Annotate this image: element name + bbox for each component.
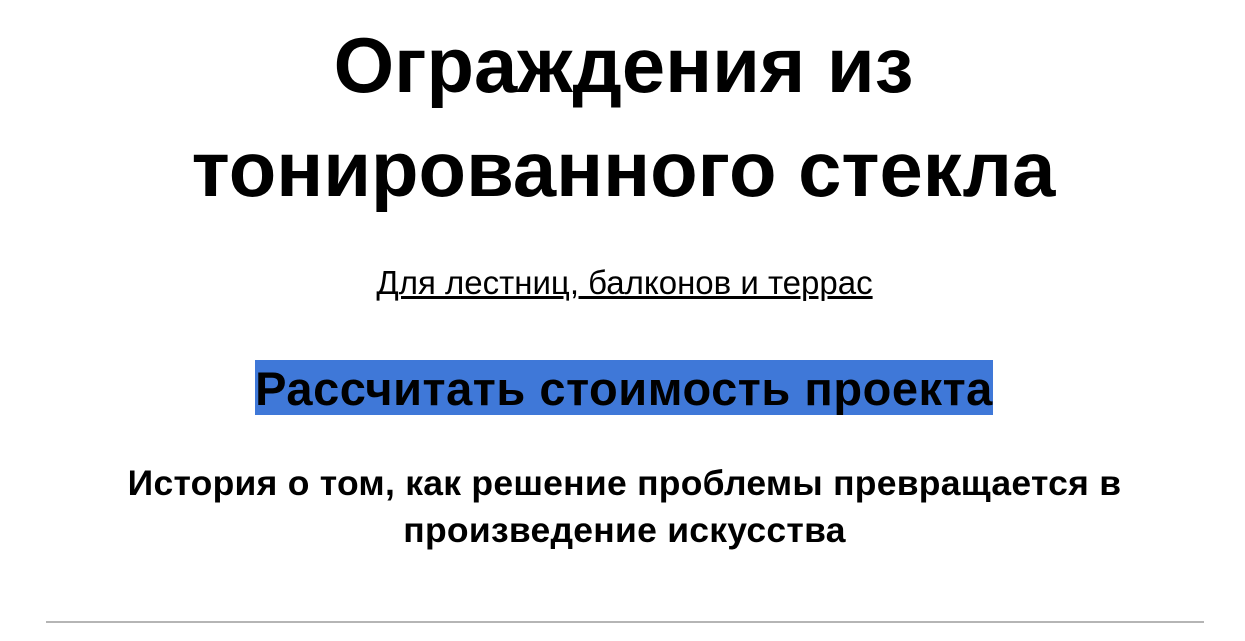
description text: История о том, как решение проблемы превращается в [128,463,1121,503]
call to action highlighted: Рассчитать стоимость проекта [255,362,993,415]
title: тонированного стекла [192,127,1055,213]
title [192,23,1056,213]
description text [128,463,1121,550]
divider line [46,621,1204,623]
title: Ограждения из [334,23,913,109]
subtitle link: Для лестниц, балконов и террас [376,264,873,301]
description text: произведение искусства [403,510,846,550]
